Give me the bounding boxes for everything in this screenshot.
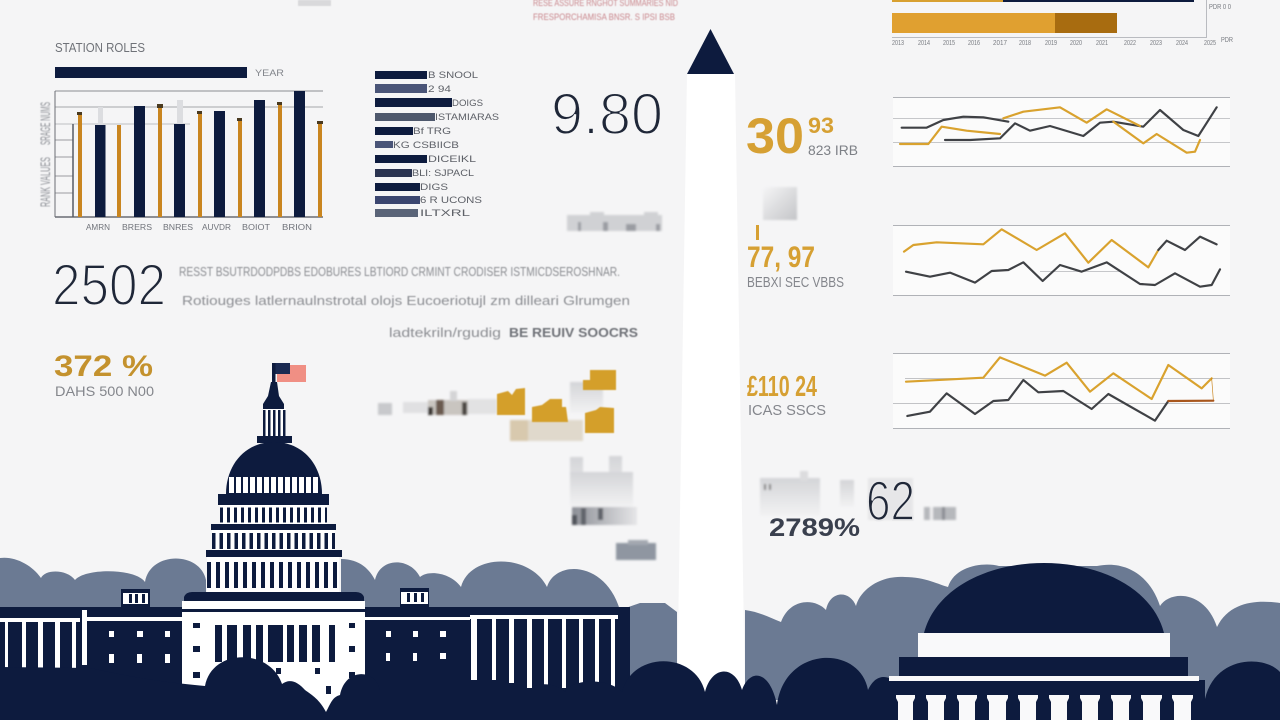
left cupola [121,589,150,608]
navy bars [95,91,305,217]
dome [226,442,322,494]
grid lines [55,91,323,217]
axis labels [892,4,1233,47]
axis labels: PDR [1221,37,1233,44]
stat value: £110 24 [747,371,817,403]
bar labels: B SNOOL [428,70,478,81]
value percent: 2789% [769,514,860,542]
dome ribs [229,477,320,493]
stat: 372 percent [54,350,154,399]
big number 9.80: 9.80 [551,82,663,147]
top gray fragment [298,0,331,6]
axis labels: 2013 [892,40,904,47]
flag pole and lantern [263,363,284,409]
x axis labels: BNRES [163,223,193,232]
paragraph text: Rotiouges latlernaulnstrotal olojs Eucoeriotujl zm dilleari Glrumgen [182,293,630,308]
gray fading block [763,187,797,220]
axis labels: 2016 [968,40,980,47]
cornice [889,676,1199,681]
panel: grouped bar chart [37,40,323,232]
line series [904,229,1220,287]
paragraph text: ladtekriln/rgudig [389,325,501,340]
x axis labels: AMRN [86,223,110,232]
pyramid cap [687,29,734,74]
panel: stacked bars top right [892,0,1233,47]
navy band [899,657,1188,676]
stat label: DAHS 500 N00 [55,383,154,399]
bar labels: KG CSBIICB [393,140,459,151]
washington monument [677,29,745,700]
bars [375,71,452,217]
bar labels [393,70,499,219]
large value: 30 [746,108,804,164]
panel: stat 110 24 [747,371,826,419]
shaft [677,74,745,700]
legend bar [55,67,247,78]
panel: line chart 2 [893,225,1230,296]
axis labels: 2022 [1124,40,1136,47]
stacked bar 1 [892,0,1194,2]
bar labels: ILTXRL [420,208,470,219]
panel: line chart 3 [893,353,1230,428]
capitol building [0,363,630,717]
stat value: 77, 97 [747,241,815,274]
panel: line chart 1 [893,97,1230,166]
bar labels: ISTAMIARAS [435,112,499,123]
x axis labels: BOIOT [242,223,270,232]
flag [273,363,306,382]
bar labels: 6 R UCONS [420,195,482,206]
bar labels: Bf TRG [413,126,451,137]
x axis labels: BRERS [122,223,152,232]
panel: stat 30 93 [746,108,858,164]
stat label: 823 IRB [808,142,858,158]
right cupola [400,588,429,608]
x axis labels: AUVDR [202,223,231,232]
gold building blocks [497,370,616,433]
axis labels: 2014 [918,40,930,47]
bar labels: 2 94 [428,84,451,95]
foreground tree line [0,657,1280,720]
stat label: BEBXI SEC VBBS [747,274,844,291]
axis labels: 2025 [1204,40,1216,47]
central portico [182,588,365,717]
stat: 62 with gray blocks [760,469,956,542]
bar labels: DIGS [420,182,448,193]
bar labels: BLI: SJPACL [412,168,474,179]
line series [906,357,1213,421]
panel: stat 77, 97 [747,225,844,291]
columns [896,695,1193,720]
left wing [0,607,182,702]
paragraph text: RESST BSUTRDODPDBS EDOBURES LBTIORD CRMINT CRODISER ISTMICDSEROSHNAR. [179,264,620,279]
axis labels: 2018 [1019,40,1031,47]
right domed building [880,563,1205,720]
axis [892,0,1207,38]
chart title: STATION ROLES [55,40,145,55]
lantern columns [257,409,292,443]
axis labels: PDR 0 0 [1209,4,1231,11]
right wing [365,607,630,707]
panel: horizontal bar list [375,70,499,219]
big number 2502: 2502 [52,253,166,318]
axis labels: 2015 [943,40,955,47]
y axis labels: RANK VALUES [37,157,53,207]
panel: grouped bar chart: SRAGE NUMS [37,102,53,145]
blurred skyline fragments [378,382,603,441]
line series [900,107,1217,153]
orange bar caps [77,102,323,124]
x axis labels [86,223,312,232]
stacked bar 2 [892,13,1117,33]
drum tiers [206,494,342,592]
small value: 93 [808,113,834,138]
gray blurred towers [570,456,656,560]
panel: red header text [533,0,678,23]
axis labels: 2021 [1096,40,1108,47]
axis labels: 2024 [1176,40,1188,47]
axis labels: 2020 [1070,40,1082,47]
gray blurred buildings [760,471,956,520]
chart frame [893,225,1230,296]
background tree line [0,558,1280,700]
axis labels: 2023 [1150,40,1162,47]
axis labels: 2019 [1045,40,1057,47]
error whiskers [98,100,183,125]
stat label: ICAS SSCS [748,402,826,419]
stat value: 372 % [54,350,153,383]
paragraph text: BE REUIV SOOCRS [509,325,638,340]
paragraph text [179,264,638,340]
chart frame [893,97,1230,166]
bar labels: DOIGS [452,98,483,109]
chart frame [893,353,1230,428]
bar labels: DICEIKL [428,154,476,165]
white drum [918,633,1170,657]
gray skyline block [567,212,662,231]
dome [924,563,1164,633]
orange bars [78,103,322,217]
x axis labels: BRION [282,223,312,232]
axis labels: 2017 [993,40,1007,47]
legend label: YEAR [255,68,284,79]
tick [756,225,759,240]
value 62: 62 [866,469,915,532]
panel: red header text: FRESPORCHAMISA BNSR. S IPSI BSB [533,12,675,23]
entablature base [880,680,1205,720]
